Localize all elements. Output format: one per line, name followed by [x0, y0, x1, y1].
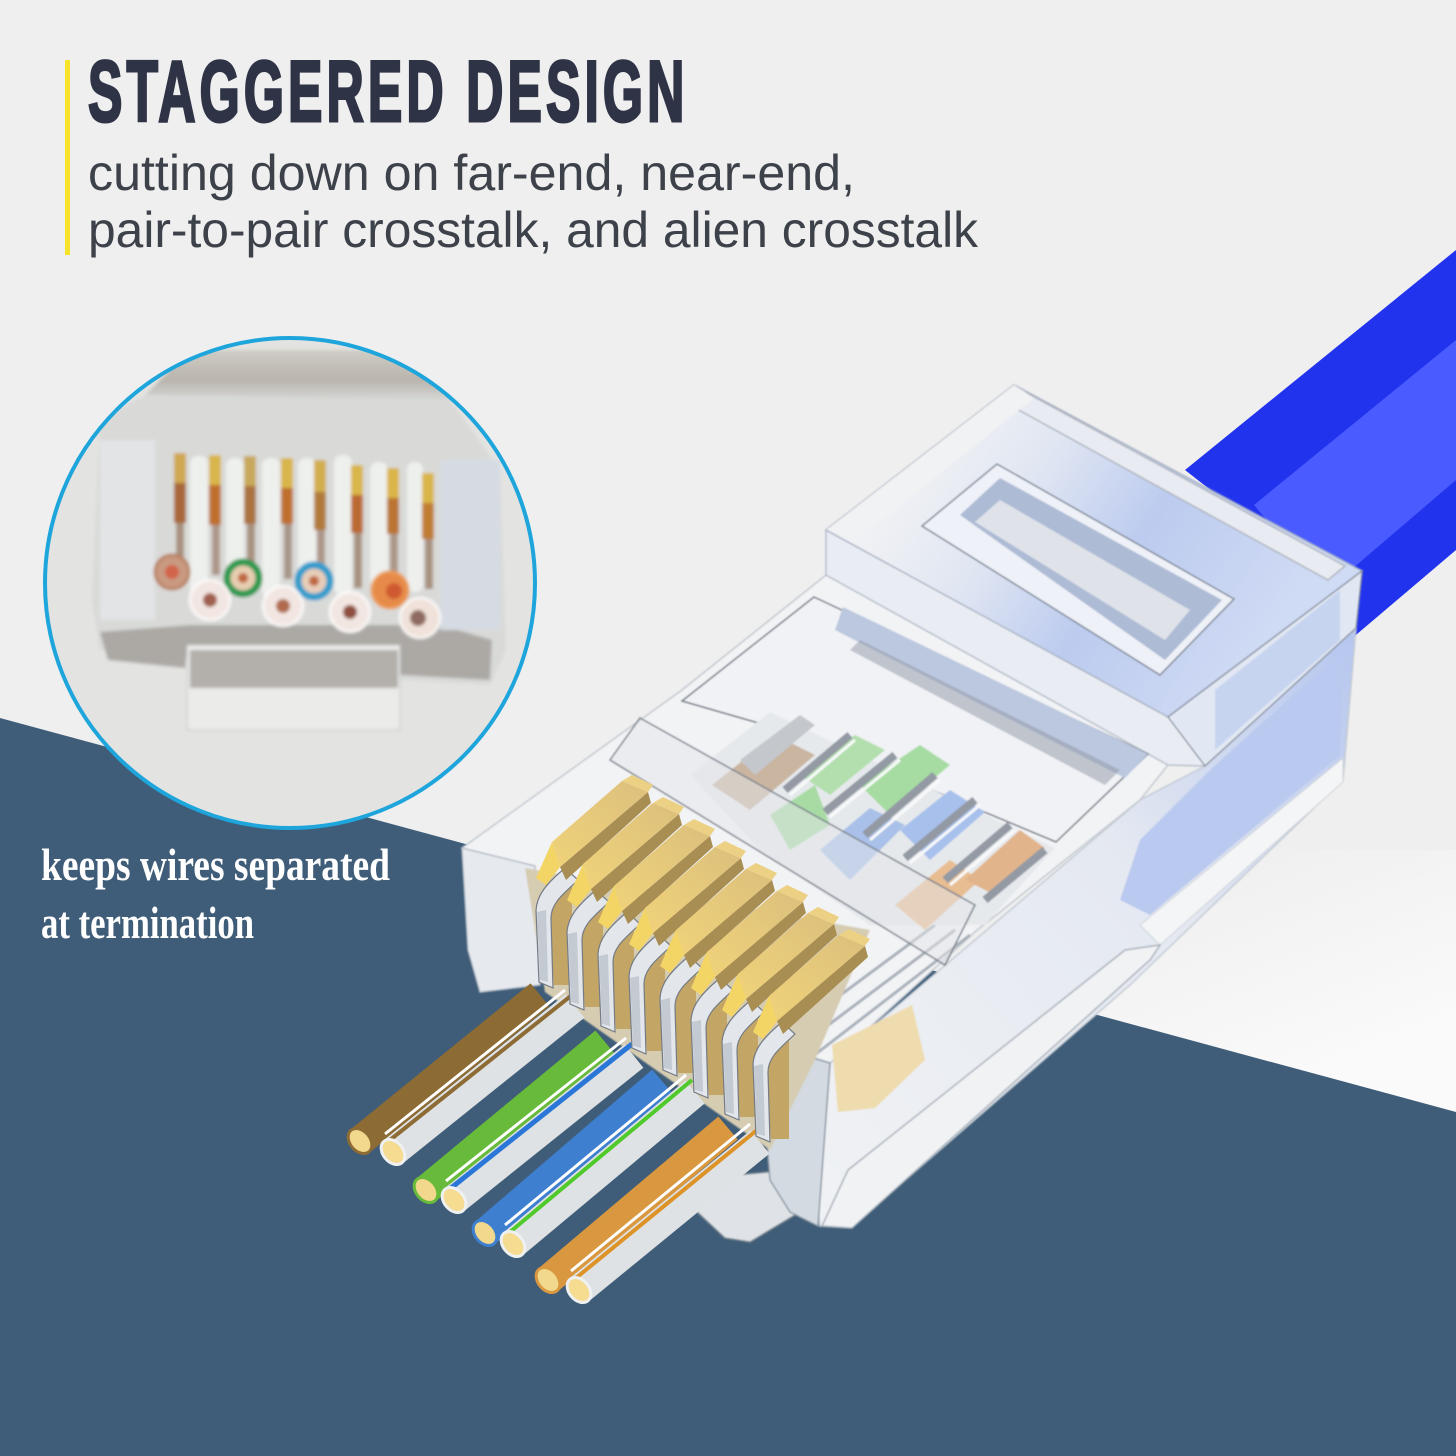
wire 6 white green [496, 1075, 695, 1261]
rear blue tint [1120, 650, 1343, 915]
subtitle [88, 145, 979, 258]
background light band [1090, 850, 1456, 1112]
wires [343, 990, 760, 1307]
contact 1 [536, 775, 653, 988]
wire 4 white blue [437, 1038, 634, 1217]
subtitle: cutting down on far-end, near-end, [88, 145, 855, 201]
latch hole [922, 464, 1234, 675]
internal gold latch [832, 1005, 925, 1112]
wire 2 white brown [376, 990, 575, 1169]
blue cable [1185, 250, 1456, 640]
contact 7 [722, 907, 839, 1120]
wire 3 green [409, 1042, 605, 1207]
caption: keeps wires separated [41, 839, 390, 890]
photo: wire ends [155, 555, 440, 638]
pin lines near front corner [780, 925, 970, 1057]
photo: side panels [100, 440, 155, 620]
photo: contact pins [174, 453, 434, 589]
subtitle: pair-to-pair crosstalk, and alien crosstalk [88, 202, 979, 258]
connector top surface [462, 575, 1168, 1063]
gold contacts [536, 775, 870, 1142]
caption: at termination [41, 897, 254, 948]
circle outline [45, 338, 535, 828]
inset photo circle [40, 335, 540, 830]
bottom tab [695, 1170, 795, 1242]
photo: connector body [92, 395, 506, 685]
title: STAGGERED DESIGN [88, 45, 684, 140]
contact 6 [691, 885, 808, 1098]
latch top highlight [826, 385, 1034, 530]
latch top [826, 385, 1362, 717]
connector right side [812, 628, 1356, 1228]
contact 2 [567, 797, 684, 1010]
photo: connector top [140, 350, 470, 400]
wire 7 orange [531, 1128, 728, 1297]
wire 8 white orange [562, 1124, 760, 1307]
wire 1 brown [343, 995, 540, 1158]
photo: clear tab [187, 645, 400, 730]
wire 5 blue [468, 1081, 662, 1250]
photo: band below wires [100, 625, 492, 680]
left block [462, 848, 540, 992]
rear latch block [826, 385, 1362, 766]
contact 8 [753, 929, 870, 1142]
caption [41, 839, 390, 948]
contact 3 [598, 819, 715, 1032]
photo: tab shadow [190, 650, 398, 688]
photo: white ridges [190, 455, 423, 598]
RJ45 connector [462, 385, 1362, 1242]
visible wires through window [690, 712, 1055, 930]
connector front right face [760, 1042, 830, 1226]
upper window [682, 597, 1148, 842]
front backing [525, 868, 870, 1150]
rear white collar [1140, 758, 1343, 945]
latch hole ridges [960, 478, 1222, 660]
dark blue background panel [0, 718, 1456, 1456]
side flange [822, 945, 1160, 1228]
contact 5 [660, 863, 777, 1076]
contact 4 [629, 841, 746, 1054]
cross bar [610, 718, 975, 965]
latch rear rail [1015, 392, 1345, 580]
accent bar [65, 60, 70, 255]
